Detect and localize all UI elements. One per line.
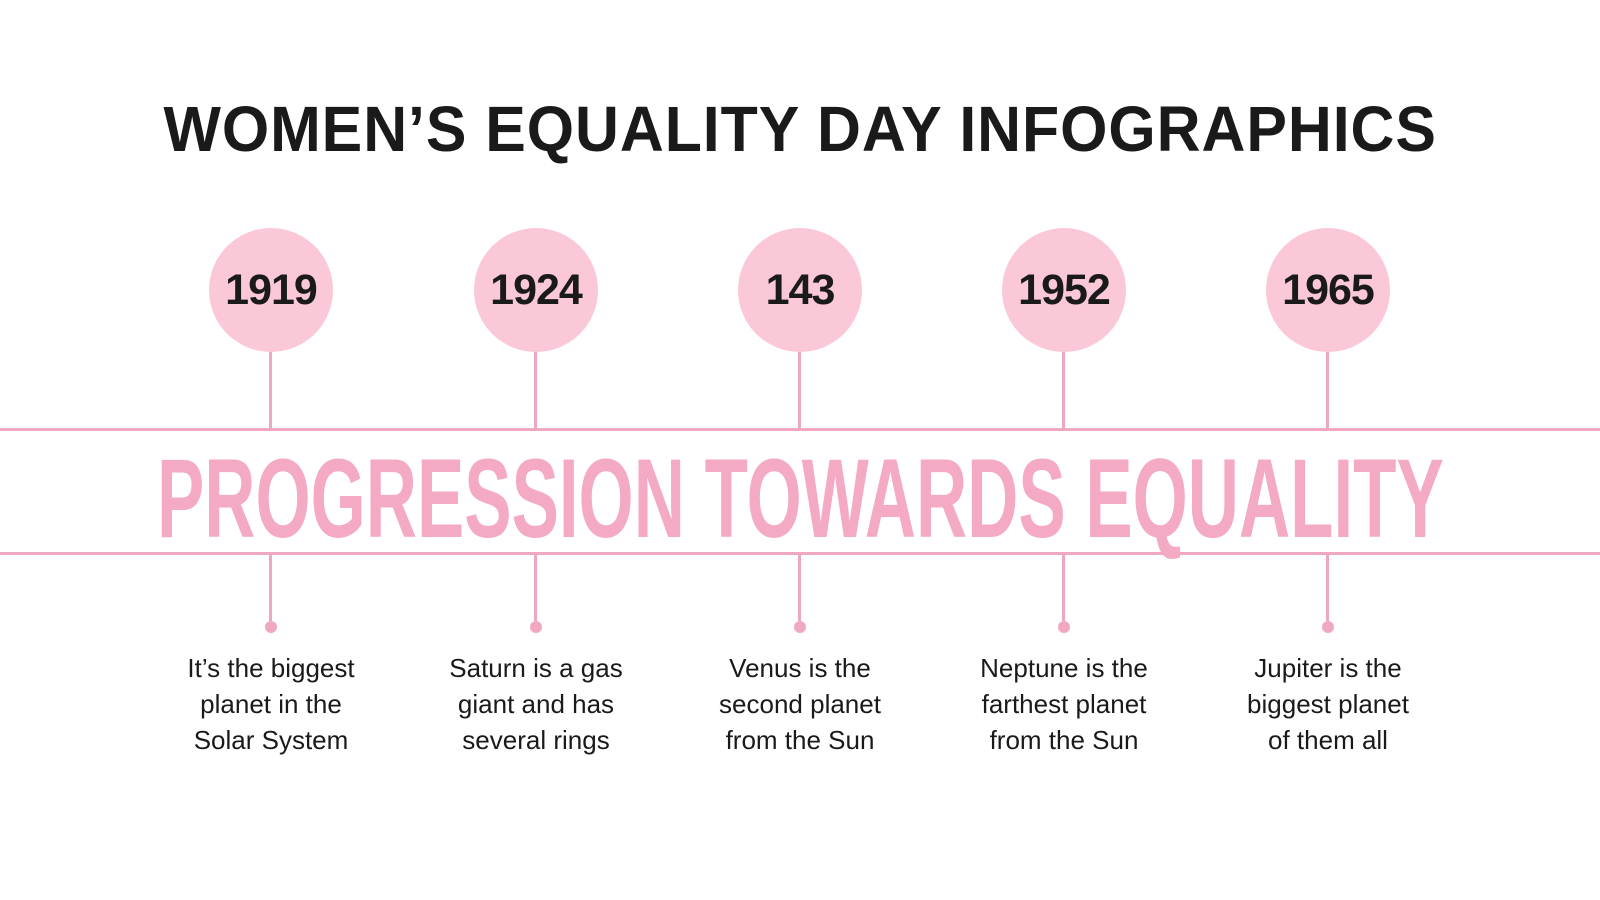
- year circle: 1965: [1282, 266, 1374, 314]
- dot: [1322, 621, 1334, 633]
- year circle: 1952: [1018, 266, 1110, 314]
- description: [980, 653, 1148, 755]
- dot: [530, 621, 542, 633]
- description: [719, 653, 881, 755]
- description: It’s the biggest: [187, 653, 355, 683]
- stem lower: [1062, 555, 1065, 621]
- year circle: 1919: [225, 266, 317, 314]
- dot: [1058, 621, 1070, 633]
- description: biggest planet: [1247, 689, 1409, 719]
- year circle: [209, 228, 333, 352]
- line: top: [0, 428, 1600, 431]
- stem: [1062, 352, 1065, 428]
- banner text: PROGRESSION TOWARDS EQUALITY: [157, 436, 1443, 561]
- description: [187, 653, 355, 755]
- dot: [794, 621, 806, 633]
- description: second planet: [719, 689, 881, 719]
- description: from the Sun: [726, 725, 874, 755]
- description: Venus is the: [729, 653, 871, 683]
- year circle: [474, 228, 598, 352]
- description: Neptune is the: [980, 653, 1148, 683]
- milestone 5: [1247, 228, 1409, 755]
- milestone 1: [187, 228, 355, 755]
- stem lower: [534, 555, 537, 621]
- title: WOMEN’S EQUALITY DAY INFOGRAPHICS: [163, 93, 1437, 165]
- stem lower: [798, 555, 801, 621]
- description: of them all: [1268, 725, 1388, 755]
- stem lower: [269, 555, 272, 621]
- year circle: [738, 228, 862, 352]
- description: planet in the: [200, 689, 342, 719]
- stem: [269, 352, 272, 428]
- milestone 2: [449, 228, 623, 755]
- year circle: [1002, 228, 1126, 352]
- milestone 3: [719, 228, 881, 755]
- stem: [1326, 352, 1329, 428]
- description: Saturn is a gas: [449, 653, 623, 683]
- description: giant and has: [458, 689, 614, 719]
- stem: [534, 352, 537, 428]
- year circle: [1266, 228, 1390, 352]
- year circle: 143: [766, 266, 834, 314]
- dot: [265, 621, 277, 633]
- description: [449, 653, 623, 755]
- description: farthest planet: [982, 689, 1146, 719]
- description: Jupiter is the: [1254, 653, 1402, 683]
- description: from the Sun: [990, 725, 1138, 755]
- description: Solar System: [194, 725, 348, 755]
- milestone 4: [980, 228, 1148, 755]
- line: bottom: [0, 552, 1600, 555]
- description: several rings: [462, 725, 610, 755]
- stem lower: [1326, 555, 1329, 621]
- description: [1247, 653, 1409, 755]
- year circle: 1924: [490, 266, 582, 314]
- stem: [798, 352, 801, 428]
